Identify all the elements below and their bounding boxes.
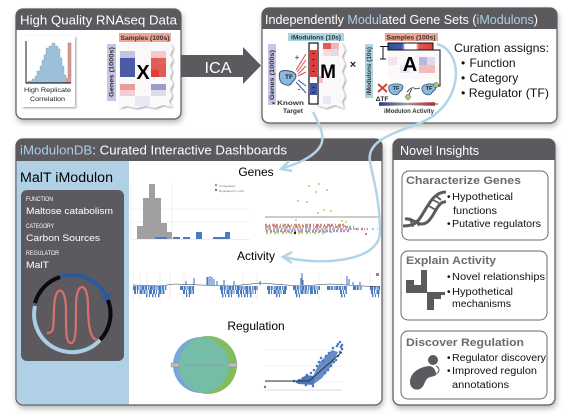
chart: M matrix: TF (285, 74, 293, 81)
chart: regulation scatter (264, 341, 343, 390)
chart: gene weight histogram: Regulated by malT (219, 189, 244, 193)
text: curation assigns: • Category (461, 71, 518, 85)
chart: A matrix: iModulon Activity (384, 109, 435, 115)
chart: A matrix (365, 33, 441, 115)
chart: M matrix (268, 33, 345, 115)
card: MalT details: FUNCTION (26, 197, 53, 203)
card: characterize genes: Characterize Genes (406, 175, 521, 187)
heading: novel insights: Novel Insights (400, 144, 479, 158)
panel: novel insights (393, 139, 555, 405)
card: explain activity: Hypothetical (452, 287, 513, 298)
arrow: M matrix to Genes (281, 112, 322, 171)
chart: gene weight scatter (265, 183, 380, 235)
chart: A matrix: ΔTF (376, 96, 388, 103)
chart: A matrix: Samples (100s) (386, 36, 436, 42)
card: MalT details: Carbon Sources (26, 233, 101, 243)
heading: iModulonDB: iModulonDB: Curated Interactive Dashboards (20, 142, 287, 158)
chart: expression matrix X: Samples (100s) (120, 36, 170, 42)
card: discover regulation: annotations (452, 380, 509, 391)
card: discover regulation: Regulator discovery (452, 353, 546, 364)
arrow: ICA: ICA (204, 60, 232, 77)
card: characterize genes: Hypothetical (452, 192, 513, 203)
card: MalT details (21, 190, 124, 361)
heading: high quality data: High Quality RNAseq Data (20, 12, 178, 28)
heading: iModulons: Independently Modulated Gene Sets (iModulons) (265, 12, 538, 27)
chart: expression matrix X: X (136, 62, 150, 84)
card: discover regulation: Discover Regulation (406, 337, 524, 349)
symbol: multiply: × (350, 59, 356, 71)
chart: A matrix: TF (426, 86, 433, 92)
card: characterize genes: • (447, 219, 451, 230)
card: discover regulation: • (447, 366, 451, 377)
chart: iModulon activity bars (133, 273, 380, 300)
arrow: ICA (181, 47, 261, 84)
card: explain activity: • (447, 272, 451, 283)
chart: M matrix: • Known (272, 101, 304, 107)
chart: A matrix: iModulons (10s) (367, 47, 373, 95)
heading: Genes: Genes (238, 165, 274, 179)
card: characterize genes: functions (453, 206, 497, 217)
card: explain activity: • (447, 287, 451, 298)
card: MalT details: CATEGORY (26, 224, 54, 230)
card: characterize genes: Putative regulators (452, 219, 541, 230)
panel: iModulonDB dashboards (16, 139, 382, 405)
chart: A matrix: A (403, 54, 417, 76)
chart: M matrix: Genes (1000s) (270, 50, 276, 100)
text: curation assigns (454, 41, 549, 100)
panel: high quality RNAseq data (16, 9, 181, 119)
icon: DNA (403, 192, 446, 227)
text: curation assigns: Curation assigns: (454, 41, 549, 55)
sidebar: MalT iModulon (20, 170, 124, 361)
card: explain activity: Explain Activity (406, 255, 497, 267)
chart: replicate correlation histogram: Correlation (30, 97, 65, 103)
chart: M matrix: - (298, 84, 300, 94)
chart: expression matrix X (107, 33, 173, 108)
icon: activity bars (406, 270, 445, 310)
chart: expression matrix X: Genes (1000s) (110, 47, 116, 97)
card: discover regulation: Improved regulon (452, 366, 537, 377)
heading: Activity: Activity (237, 249, 275, 263)
chart: replicate correlation histogram: High Replicate (24, 88, 72, 94)
chart: gene weight histogram (131, 183, 250, 239)
text: curation assigns: • Function (461, 56, 516, 70)
card: characterize genes (402, 171, 548, 240)
chart: replicate correlation histogram (22, 36, 75, 107)
panel: independently modulated gene sets (262, 8, 557, 123)
sidebar heading: MalT iModulon (20, 170, 113, 185)
text: curation assigns: • Regulator (TF) (461, 86, 549, 100)
card: MalT details: REGULATOR (26, 251, 60, 257)
card: explain activity: mechanisms (452, 299, 511, 310)
chart: M matrix: iModulons (10s) (291, 36, 341, 42)
arrow: A matrix to Activity (283, 44, 456, 263)
chart: M matrix: + (295, 53, 300, 62)
card: discover regulation: • (447, 353, 451, 364)
icon: regulator binding (410, 355, 439, 390)
chart: venn diagram (171, 336, 237, 394)
chart: M matrix: Target (283, 109, 303, 115)
card: MalT details: MalT (26, 260, 50, 270)
card: explain activity: Novel relationships (452, 272, 545, 283)
chart: gene weight histogram: Unregulated (219, 184, 236, 188)
chart: M matrix: M (320, 62, 336, 83)
card: discover regulation (401, 331, 547, 399)
icon: maltose genome circle (34, 275, 111, 352)
heading: Regulation: Regulation (227, 319, 285, 333)
card: characterize genes: • (447, 192, 451, 203)
chart: A matrix: TF (393, 86, 400, 92)
card: MalT details: Maltose catabolism (26, 206, 113, 216)
card: explain activity (401, 251, 547, 320)
